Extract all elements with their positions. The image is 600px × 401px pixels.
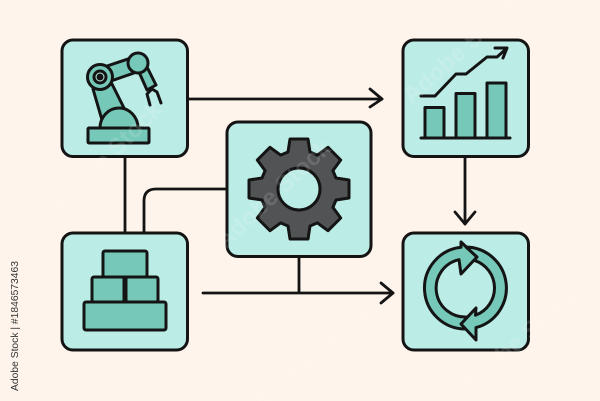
panel: growth chart bbox=[403, 40, 528, 156]
watermark text: Adobe Stock bbox=[211, 134, 337, 254]
watermark text: Adobe Stock bbox=[456, 281, 584, 399]
panel: stacked blocks bbox=[62, 233, 188, 350]
arrow: chart to cycle bbox=[455, 157, 475, 224]
panel: robot arm bbox=[62, 40, 188, 156]
icon: robot arm bbox=[88, 53, 161, 143]
panel: cycle bbox=[403, 233, 528, 350]
connector: gear to blocks bbox=[144, 189, 226, 232]
arrow: robot to chart bbox=[188, 89, 382, 107]
icon: gear bbox=[249, 139, 349, 239]
icon: bar chart with rising arrow bbox=[421, 48, 510, 138]
icon: circular arrows bbox=[424, 242, 506, 340]
credit text: Adobe Stock | #1846573463 bbox=[9, 261, 21, 391]
icon: block stack bbox=[84, 251, 166, 330]
watermark text: Adobe Stock bbox=[45, 96, 168, 219]
arrow: blocks to cycle bbox=[203, 283, 393, 303]
connector: robot to blocks bbox=[124, 157, 126, 232]
panel: gear bbox=[227, 122, 371, 256]
connector: gear to lower arrow bbox=[298, 257, 300, 293]
